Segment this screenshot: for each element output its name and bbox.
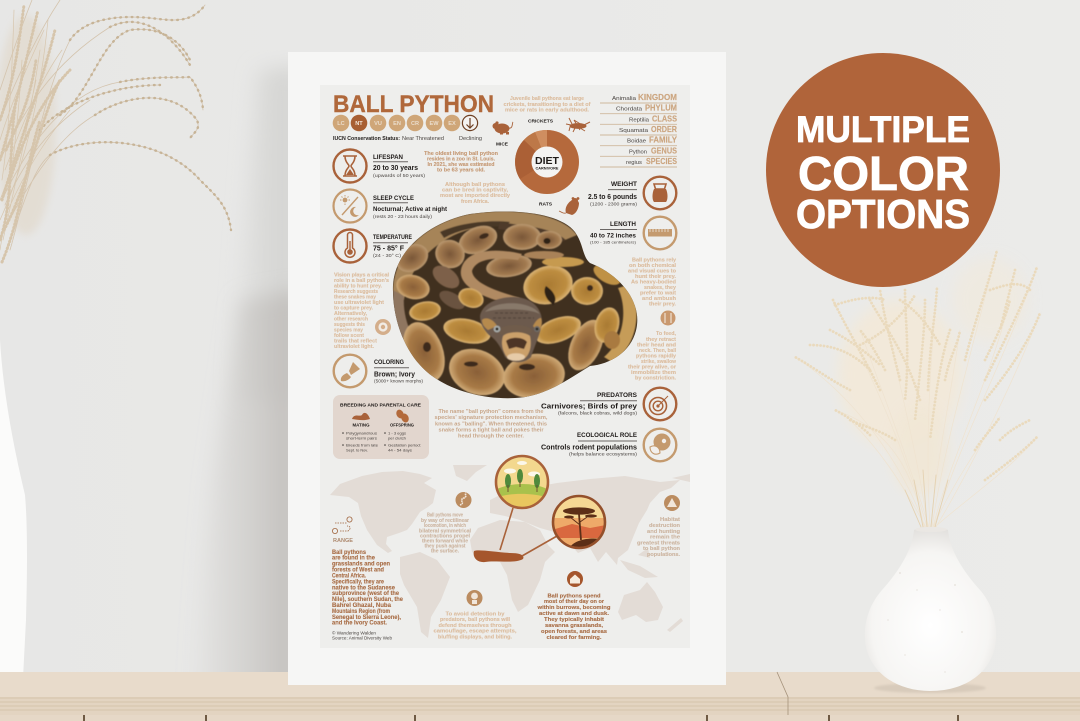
ecological role text: (helps balance ecosystems)	[569, 452, 638, 456]
text: locomotion	[419, 512, 472, 554]
text: daily habits: open forests, and areas	[541, 629, 607, 635]
panel: taxonomy: Python	[629, 149, 647, 155]
icon: ruler	[644, 217, 676, 249]
badge: multiple color options: OPTIONS	[796, 191, 970, 237]
ecological role text: ECOLOGICAL ROLE	[577, 432, 637, 439]
predators text: (falcons, black cobras, wild dogs)	[558, 410, 637, 416]
panel: taxonomy: Chordata	[616, 107, 643, 113]
panel: breeding and parental care: Polygynandrous	[346, 430, 377, 436]
conservation status text: Near Threatened	[402, 136, 444, 142]
panel: breeding and parental care: Sept. to Nov.	[346, 448, 368, 452]
length text: (100 - 185 centimeters)	[590, 240, 637, 244]
text: chemical and visual cues: hunt their prey.	[635, 274, 677, 280]
panel: breeding and parental care: Breeds from late	[346, 442, 378, 448]
text: oldest living ball python: In 2021, she was estimated	[428, 162, 494, 168]
panel: taxonomy: GENUS	[651, 145, 677, 155]
text: locomotion: the surface.	[431, 548, 460, 554]
text: vision: use ultraviolet light	[334, 300, 384, 306]
icon: rat	[559, 197, 579, 215]
weight text: (1200 - 2300 grams)	[590, 202, 638, 206]
coloring text	[374, 359, 423, 384]
white frame	[288, 52, 726, 685]
temperature text	[373, 235, 412, 258]
conservation status badges: LC	[337, 121, 345, 127]
text: chemical and visual cues: their prey.	[649, 302, 677, 308]
panel: taxonomy: Animalia	[612, 96, 637, 102]
icon: target	[644, 388, 676, 420]
panel: breeding and parental care: BREEDING AND PARENTAL CARE	[340, 402, 422, 408]
icon: warning	[664, 495, 680, 511]
text: juvenile diet: mice or rats in early adulthood.	[505, 108, 590, 114]
temperature text: (24 - 30° C)	[373, 253, 402, 258]
panel: taxonomy	[600, 92, 677, 167]
text: locomotion: by way of rectilinear	[421, 518, 469, 524]
text: vision: Alternatively,	[334, 311, 368, 317]
text: daily habits: They typically inhabit	[544, 617, 604, 623]
text: range description: Specifically, they are	[332, 580, 385, 586]
icon: paintbrush	[334, 355, 366, 387]
text: captivity note: can be bred in captivity,	[442, 188, 509, 194]
text: locomotion: they push against	[424, 544, 466, 550]
conservation status badges: EW	[429, 121, 439, 127]
text: juvenile diet: Juvenile ball pythons eat large	[510, 96, 584, 102]
text: vision: Vision plays a critical	[334, 272, 390, 278]
text: range description: subprovince (west of the	[332, 591, 400, 597]
panel: breeding and parental care: 44 - 54 days	[388, 448, 412, 452]
range label: RANGE	[333, 538, 354, 544]
icon: mating snakes	[352, 413, 370, 420]
chart: diet donut: DIET	[535, 156, 559, 167]
ecological role text	[541, 432, 638, 456]
text: how they feed: pythons rapidly	[636, 354, 676, 360]
conservation status text	[333, 136, 482, 142]
text: daily habits: active at dawn and dusk.	[539, 611, 609, 617]
text: range description: Nile), southern Sudan, the	[332, 597, 404, 603]
conservation status text: IUCN Conservation Status:	[333, 136, 400, 142]
length text: LENGTH	[610, 221, 636, 228]
text: chemical and visual cues: snakes, they	[644, 285, 676, 291]
text: daily habits: savanna grasslands,	[545, 623, 603, 629]
snake photo	[392, 212, 638, 398]
text: threats	[637, 517, 681, 558]
predators text: Carnivores; Birds of prey	[541, 404, 637, 410]
text: name origin: known as "balling". When threatened, this	[435, 422, 547, 428]
icon: locomotion	[456, 492, 472, 508]
text: defense: bluffing displays, and biting.	[438, 634, 513, 640]
text: how they feed: they retract	[646, 337, 676, 343]
text: vision	[334, 272, 390, 350]
text: how they feed: To feed,	[656, 331, 677, 337]
text: oldest living ball python: The oldest living ball python	[424, 151, 498, 157]
text: how they feed: strike, swallow	[641, 359, 676, 365]
text: vision: ultraviolet light.	[334, 344, 375, 350]
text: how they feed: their prey alive, or	[628, 364, 676, 370]
length text: 40 to 72 inches	[590, 232, 636, 240]
text: daily habits: cleared for farming.	[546, 635, 602, 641]
text: locomotion: contractions propel	[420, 534, 471, 540]
text: chemical and visual cues: Ball pythons rely	[632, 258, 676, 264]
text: locomotion: bilateral symmetrical	[419, 528, 472, 534]
icon: lifespan hourglass	[334, 150, 366, 182]
icon: fork and knife	[660, 310, 676, 326]
text: defense: camouflage, escape attempts,	[434, 628, 517, 634]
text: daily habits: within burrows, becoming	[536, 605, 611, 611]
text: captivity note: from Africa.	[461, 199, 490, 205]
dried flowers in vase	[795, 250, 1040, 527]
length text	[590, 221, 637, 244]
panel: world map	[330, 465, 690, 638]
diet labels: RATS	[539, 202, 553, 208]
text: name origin: species' signature protection mechanism,	[434, 415, 548, 421]
text: locomotion: locomotion, in which	[424, 523, 466, 529]
text: how they feed: immobilize them	[631, 370, 677, 376]
text: vision: other research	[334, 316, 368, 322]
diet labels	[496, 118, 554, 208]
panel: breeding and parental care: per clutch	[388, 436, 406, 440]
text: daily habits: most of their day on or	[544, 599, 605, 605]
badge: multiple color options: MULTIPLE	[796, 109, 970, 150]
text: chemical and visual cues: and ambush	[642, 296, 676, 302]
conservation status badges	[333, 115, 478, 131]
left vase	[0, 340, 27, 688]
icon: home	[567, 571, 583, 587]
panel: breeding and parental care	[333, 395, 429, 459]
icon: camouflage	[466, 590, 482, 606]
shelf	[0, 672, 1080, 721]
habitat illustration: grassland	[495, 455, 549, 510]
panel: breeding and parental care: MATING	[352, 422, 370, 428]
lifespan text: (upwards of 50 years)	[373, 173, 425, 179]
credits: Source: Animal Diversity Web	[332, 636, 393, 640]
icon: range arrows	[332, 517, 352, 534]
text: vision: trails that reflect	[334, 338, 377, 344]
text: name origin: The name "ball python" comes from the	[438, 409, 544, 415]
text: range description: and the Ivory Coast.	[332, 620, 387, 626]
conservation status text: Declining	[459, 136, 482, 142]
chart: diet donut: CARNIVORE	[536, 166, 559, 170]
icon: ecosystem gear and leaf	[644, 429, 676, 461]
text: chemical and visual cues: As heavy-bodied	[631, 280, 676, 286]
sleep cycle text: Nocturnal; Active at night	[373, 206, 448, 213]
diet labels: MICE	[496, 142, 509, 148]
text: juvenile diet	[504, 96, 591, 114]
front coil patches	[403, 322, 446, 380]
text: how they feed: their head and	[637, 342, 676, 348]
text: oldest living ball python: resides in a zoo in St. Louis.	[427, 156, 496, 162]
lifespan text: 20 to 30 years	[373, 163, 418, 172]
text: juvenile diet: crickets, transitioning to a diet of	[504, 102, 591, 108]
back coil outer band	[393, 212, 577, 300]
diet labels: CRICKETS	[528, 118, 554, 124]
temperature text: 75 - 85° F	[373, 244, 405, 252]
text: vision: to capture prey.	[334, 306, 374, 312]
text: daily habits	[536, 594, 611, 641]
icon: cricket	[566, 118, 590, 132]
panel: taxonomy: SPECIES	[646, 156, 677, 166]
panel: taxonomy: KINGDOM	[638, 92, 677, 102]
icon: mouse	[492, 121, 513, 134]
text: defense	[434, 612, 517, 640]
text: defense: defend themselves through	[438, 623, 512, 629]
badge: multiple color options: COLOR	[798, 148, 969, 201]
text: oldest living ball python: to be 63 years old.	[437, 168, 486, 174]
text: oldest living ball python	[424, 151, 498, 174]
text: threats: destruction	[649, 523, 680, 529]
text: daily habits: Ball pythons spend	[548, 594, 601, 600]
panel: breeding and parental care: OFFSPRING	[390, 422, 414, 428]
text: how they feed: neck. Then, ball	[639, 348, 677, 354]
text: threats: remain the	[650, 534, 680, 540]
text: captivity note: Although ball pythons	[445, 182, 505, 188]
lifespan text: LIFESPAN	[373, 154, 403, 161]
panel: breeding and parental care: Gestation period:	[388, 442, 421, 448]
weight text	[588, 181, 638, 206]
text: threats: populations.	[647, 552, 681, 558]
dark marks on patches	[423, 342, 431, 352]
text: range description: grasslands and open	[332, 562, 390, 568]
badge: multiple color options	[766, 53, 1000, 287]
text: range description	[332, 550, 404, 626]
icon: sleep cycle	[334, 190, 366, 222]
predators text: PREDATORS	[597, 392, 637, 399]
conservation status badges: EN	[393, 121, 401, 127]
conservation status badges: VU	[374, 121, 382, 127]
icon: eggs	[395, 408, 410, 424]
sleep cycle text	[373, 195, 448, 219]
coloring text: Brown; Ivory	[374, 370, 416, 378]
chart: diet donut	[515, 130, 579, 194]
text: vision: suggests this	[334, 322, 365, 328]
snake head	[480, 297, 542, 362]
text: locomotion: them forward while	[422, 538, 468, 544]
text: range description: forests of West and	[332, 568, 384, 574]
text: vision: ability to hunt prey.	[334, 284, 383, 290]
looping neck band	[461, 251, 522, 305]
text: name origin	[434, 409, 548, 440]
weight text: WEIGHT	[611, 181, 637, 188]
panel: breeding and parental care: short-term pairs	[346, 436, 377, 440]
habitat illustration: savanna tree at sunset	[552, 495, 606, 550]
text: chemical and visual cues: on both chemical	[629, 263, 677, 269]
coloring text: (5000+ known morphs)	[374, 378, 423, 384]
panel: taxonomy: regius	[626, 160, 642, 166]
lifespan text	[373, 154, 425, 179]
text: range description: Ball pythons	[332, 550, 367, 556]
panel: taxonomy: Reptilia	[629, 117, 650, 123]
back coil patches	[458, 225, 498, 255]
text: chemical and visual cues: and visual cues to	[628, 268, 676, 274]
text: defense: To avoid detection by	[446, 612, 505, 618]
text: captivity note	[440, 182, 510, 205]
panel: taxonomy: ORDER	[651, 124, 677, 134]
text: range description: Mountains Region (from	[332, 609, 390, 615]
icon: temperature thermometer	[334, 230, 366, 262]
text: vision: role in a ball python's	[334, 278, 389, 284]
text: range description: Bahrel Ghazal, Nuba	[332, 603, 392, 609]
text: captivity note: most are imported directly	[440, 193, 510, 199]
text: locomotion: Ball pythons move	[427, 512, 463, 518]
conservation status badges: CR	[411, 121, 419, 127]
icon: eye	[375, 319, 391, 335]
icon: kettlebell	[644, 177, 676, 209]
text: vision: species may	[334, 328, 363, 334]
text: name origin: head through the center.	[458, 434, 525, 440]
text: how they feed: by constriction.	[635, 376, 677, 382]
panel: taxonomy: FAMILY	[649, 135, 677, 145]
ecological role text: Controls rodent populations	[541, 444, 637, 452]
dried pampas grass	[0, 0, 231, 262]
predators text	[541, 392, 637, 416]
frame shadow	[209, 66, 288, 672]
conservation status badges: NT	[355, 121, 363, 127]
text: threats: to ball python	[643, 546, 680, 552]
title: BALL PYTHON	[333, 91, 494, 118]
weight text: 2.5 to 6 pounds	[588, 192, 637, 201]
text: range description: Senegal to Sierra Leone),	[332, 615, 401, 621]
text: range description: are found in the	[332, 556, 376, 562]
text: chemical and visual cues	[628, 258, 677, 308]
credits: © Wandering Walden	[332, 630, 377, 636]
sleep cycle text: SLEEP CYCLE	[373, 195, 415, 202]
coloring text: COLORING	[374, 359, 404, 366]
text: threats: Habitat	[660, 517, 680, 523]
text: chemical and visual cues: prefer to wait	[640, 290, 676, 296]
text: threats: and hunting	[647, 529, 680, 535]
credits	[332, 630, 393, 640]
temperature text: TEMPERATURE	[373, 235, 412, 241]
text: vision: these snakes may	[334, 294, 376, 300]
panel: taxonomy: CLASS	[652, 113, 677, 123]
panel: breeding and parental care: 1 - 3 eggs	[388, 430, 406, 436]
text: threats: greatest threats	[637, 540, 680, 546]
text: vision: Research suggests	[334, 289, 378, 295]
text: how they feed	[628, 331, 677, 382]
text: defense: predators, ball pythons will	[440, 617, 511, 623]
text: range description: Central Africa.	[332, 574, 366, 580]
text: name origin: snake forms a tight ball and pokes their	[438, 428, 544, 434]
range area and connector lines	[474, 508, 557, 562]
panel: taxonomy: PHYLUM	[645, 103, 677, 113]
sleep cycle text: (rests 20 - 23 hours daily)	[373, 214, 433, 219]
conservation status badges: EX	[448, 121, 456, 127]
right vase	[865, 527, 996, 693]
icon: declining arrow	[462, 115, 478, 131]
text: vision: follow scent	[334, 333, 364, 339]
text: range description: native to the Sudanese	[332, 586, 396, 592]
panel: taxonomy: Squamata	[619, 128, 649, 134]
panel: taxonomy: Boidae	[627, 139, 646, 145]
poster paper	[320, 85, 690, 648]
